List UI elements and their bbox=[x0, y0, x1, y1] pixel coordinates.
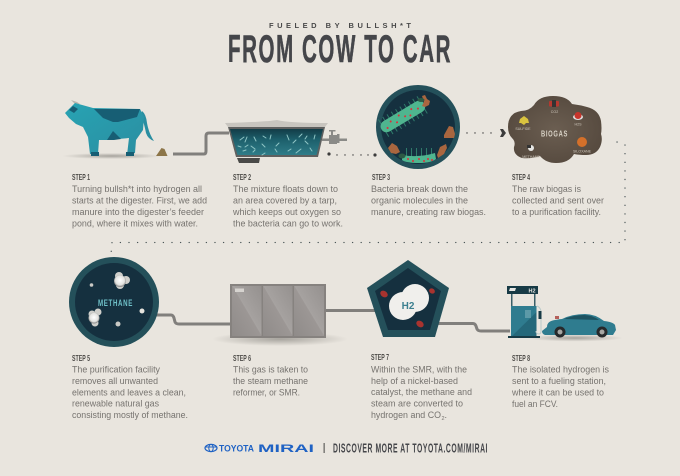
step 5 text: The purification facility bbox=[72, 364, 160, 374]
step 4 text: to a purification facility. bbox=[512, 207, 601, 217]
icon: digester tank bbox=[225, 120, 347, 163]
step 3 text: Bacteria break down the bbox=[371, 184, 468, 194]
footer: Toyota Mirai logo: MIRAI bbox=[258, 443, 314, 455]
footer: call to action: DISCOVER MORE AT TOYOTA.COM/MIRAI bbox=[333, 442, 488, 456]
step 8 text: where it can be used to bbox=[511, 388, 604, 398]
pipe: pentagon to station bbox=[438, 324, 510, 331]
step 1 text: pond, where it mixes with water. bbox=[72, 218, 198, 228]
icon: fuel pump: H2 bbox=[528, 288, 536, 294]
step 3 text: STEP 3 bbox=[372, 172, 390, 182]
arrow: to biogas bbox=[500, 129, 506, 137]
step 2 text: STEP 2 bbox=[233, 172, 251, 182]
step 7 text: steam are converted to bbox=[371, 398, 463, 408]
step 5 text: STEP 5 bbox=[72, 353, 90, 363]
step 5 text: consisting mostly of methane. bbox=[72, 410, 188, 420]
dotted path: step 4 to step 5 bbox=[111, 142, 625, 254]
step 2 text bbox=[232, 172, 343, 228]
step 8 text: sent to a fueling station, bbox=[512, 376, 606, 386]
step 1 text: STEP 1 bbox=[72, 172, 90, 182]
footer: Toyota Mirai logo bbox=[205, 443, 314, 455]
step 8 text bbox=[511, 353, 609, 409]
step 3 text bbox=[371, 172, 486, 217]
pipe: SMR to pentagon bbox=[326, 309, 375, 312]
step 4 text bbox=[512, 172, 604, 217]
step 7 text: hydrogen and CO bbox=[371, 410, 441, 420]
molecule: CO2: CO2 bbox=[551, 110, 558, 114]
step 4 text: STEP 4 bbox=[512, 172, 530, 182]
step 7 text: STEP 7 bbox=[371, 352, 389, 362]
molecules bbox=[88, 272, 144, 326]
bacterium bottom bbox=[402, 153, 436, 163]
step 5 text: removes all unwanted bbox=[72, 376, 158, 386]
step 6 text: This gas is taken to bbox=[233, 364, 308, 374]
molecule: methane: METHANE bbox=[522, 155, 540, 159]
label: biogas: BIOGAS bbox=[541, 128, 568, 138]
eyebrow: Fueled by Bullsh*t: FUELED BY BULLSH*T bbox=[269, 21, 411, 30]
icon: biogas cloud bbox=[508, 96, 602, 163]
pipe: manure to digester bbox=[173, 133, 229, 154]
step 7 text: . bbox=[444, 410, 447, 420]
icon: manure pile bbox=[156, 148, 168, 156]
manure particles bbox=[388, 95, 455, 158]
step 8 text: fuel an FCV. bbox=[512, 399, 558, 409]
pipe: methane to SMR bbox=[156, 315, 231, 324]
icon: pentagon reactor bbox=[367, 260, 449, 337]
icon: cow bbox=[62, 100, 162, 159]
step 8 text: STEP 8 bbox=[512, 353, 530, 363]
step 2 text: the bacteria can go to work. bbox=[233, 218, 343, 228]
step 1 text: starts at the digester. First, we add bbox=[72, 196, 207, 206]
title: From Cow to Car: FROM COW TO CAR bbox=[228, 28, 452, 71]
step 2 text: which keeps out oxygen so bbox=[232, 207, 341, 217]
step 6 text bbox=[233, 353, 308, 398]
dotted connectors bbox=[327, 132, 492, 157]
step 5 text: renewable natural gas bbox=[72, 398, 159, 408]
footer: Toyota Mirai logo: TOYOTA bbox=[219, 444, 254, 454]
step 1 text: manure into the digester’s feeder bbox=[72, 207, 204, 217]
step 1 text bbox=[72, 172, 207, 228]
step 5 text: elements and leaves a clean, bbox=[72, 388, 186, 398]
molecule: H2S: H2S bbox=[574, 122, 582, 126]
ground shadow: SMR bbox=[212, 332, 348, 346]
molecule: siloxane: SILOXANE bbox=[573, 150, 592, 154]
icon: methane circle bbox=[69, 257, 159, 347]
icon: valve bbox=[322, 130, 347, 144]
step 3 text: manure, creating raw biogas. bbox=[371, 207, 486, 217]
step 4 text: The raw biogas is bbox=[512, 184, 581, 194]
step 7 text: 2 bbox=[442, 416, 445, 422]
step 8 text: The isolated hydrogen is bbox=[512, 364, 609, 374]
step 4 text: collected and sent over bbox=[512, 196, 604, 206]
step 7 text: catalyst, the methane and bbox=[371, 387, 472, 397]
icon: SMR unit bbox=[230, 284, 326, 338]
bacterium top bbox=[378, 98, 427, 135]
step 6 text: STEP 6 bbox=[233, 353, 251, 363]
icon: car bbox=[542, 314, 616, 338]
molecule: sulfide: SULFIDE bbox=[515, 127, 531, 131]
hydrogen molecule bbox=[389, 292, 417, 320]
step 5 text bbox=[72, 353, 188, 420]
step 6 text: reformer, or SMR. bbox=[233, 388, 300, 398]
worms in tank bbox=[238, 134, 315, 155]
step 6 text: the steam methane bbox=[233, 376, 308, 386]
step 2 text: an area covered by a tarp, bbox=[233, 196, 337, 206]
step 2 text: The mixture floats down to bbox=[233, 184, 338, 194]
icon: bacteria circle bbox=[376, 85, 460, 169]
label: methane: METHANE bbox=[98, 298, 133, 309]
particles bbox=[379, 287, 436, 329]
step 3 text: organic molecules in the bbox=[371, 196, 468, 206]
label: H2: H2 bbox=[402, 301, 415, 312]
ground shadow: car bbox=[527, 334, 623, 342]
step 7 text: Within the SMR, with the bbox=[371, 364, 467, 374]
step 1 text: Turning bullsh*t into hydrogen all bbox=[72, 184, 202, 194]
step 7 text: help of a nickel-based bbox=[371, 376, 458, 386]
footer divider bbox=[324, 443, 325, 453]
step 7 text bbox=[371, 352, 472, 422]
icon: fuel pump bbox=[507, 286, 542, 338]
